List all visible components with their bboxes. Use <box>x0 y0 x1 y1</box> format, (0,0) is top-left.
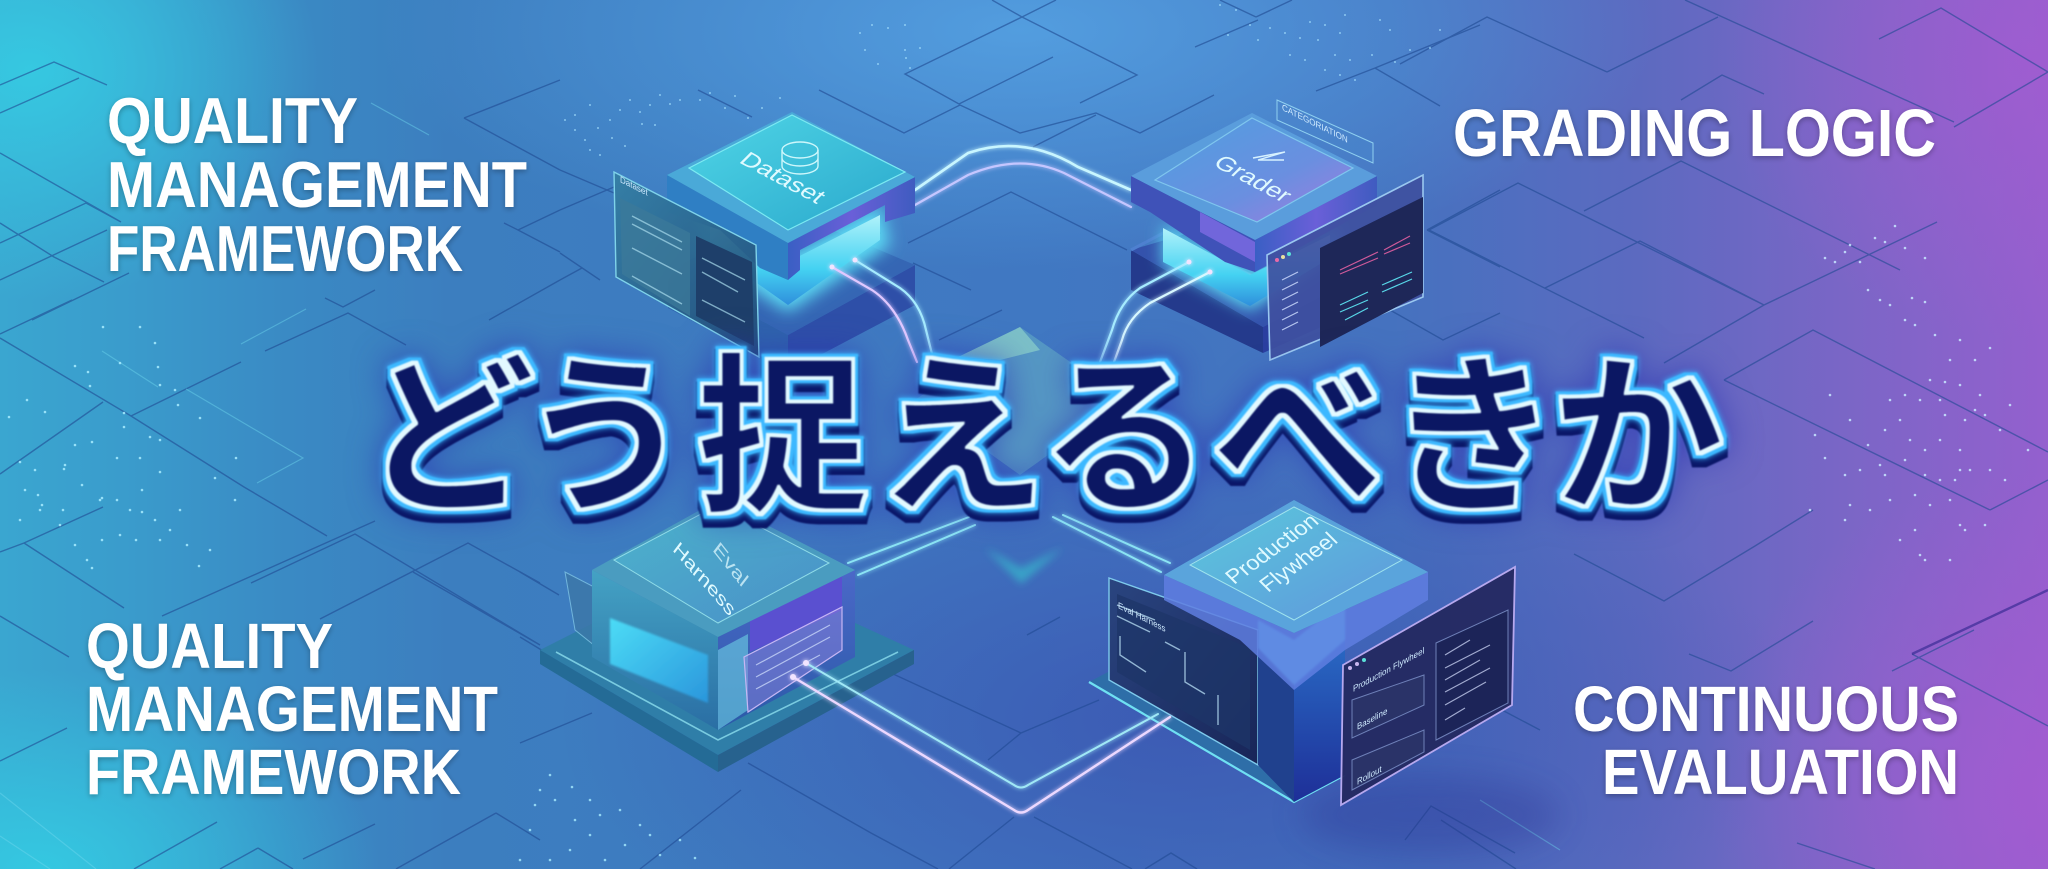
production right panel <box>1341 567 1515 805</box>
connectors: grader to hub <box>1100 262 1210 362</box>
production left panel: Eval Harness <box>1118 600 1166 634</box>
label: bottom-right: EVALUATION <box>1602 736 1959 808</box>
dataset side panel <box>614 172 759 357</box>
production right panel: Rollout <box>1357 763 1382 787</box>
label: top-left: MANAGEMENT <box>107 148 527 221</box>
connectors: dataset to grader <box>915 146 1131 207</box>
eval top plate <box>614 505 829 623</box>
grader top plate <box>1155 118 1353 222</box>
production label line 2: Flywheel <box>1254 528 1342 597</box>
grader side panel <box>1267 175 1423 360</box>
label: bottom-right: CONTINUOUS <box>1573 673 1959 745</box>
background 2: thick accent lines <box>1912 590 2048 654</box>
particle dots: top clusters <box>565 5 1440 155</box>
dataset frame sides <box>667 112 915 280</box>
label: bottom-left: MANAGEMENT <box>86 673 498 745</box>
grader frame sides <box>1131 113 1377 272</box>
grader label: Grader <box>1208 151 1297 207</box>
connectors: hub upper routes <box>848 515 1170 575</box>
grader glow core <box>1163 225 1340 310</box>
background highlight lines <box>0 103 1560 869</box>
label: bottom-left: QUALITY <box>86 610 333 682</box>
dataset side panel: Dataset <box>620 174 648 198</box>
floating tag: CATEGORIATION <box>1282 102 1348 145</box>
label: bottom-right <box>1573 673 1959 808</box>
cube: Dataset <box>614 112 915 372</box>
label: top-right: GRADING LOGIC <box>1453 96 1936 171</box>
icon: database <box>782 142 818 174</box>
soft floor shadow <box>1300 775 1560 855</box>
icon: pen <box>1253 152 1285 160</box>
production left panel <box>1109 578 1258 765</box>
eval glow window <box>610 618 708 703</box>
floating tag <box>1277 100 1373 163</box>
production label line 1: Production <box>1220 509 1324 589</box>
eval top <box>592 500 855 637</box>
title: どう捉えるべきか <box>363 343 1724 535</box>
connectors: dataset to hub <box>832 260 933 362</box>
label: top-left: FRAMEWORK <box>107 212 463 285</box>
particle dots: right cluster <box>1810 226 2028 560</box>
connector start glints <box>790 258 1212 680</box>
connectors: V route eval to production <box>793 663 1170 812</box>
dataset top plate <box>689 115 905 230</box>
eval right face <box>718 570 855 730</box>
cube: Grader <box>1131 100 1423 360</box>
label: bottom-left <box>86 610 498 808</box>
production right panel: Baseline <box>1357 705 1387 732</box>
eval overlay panel <box>744 607 842 712</box>
eval back panel <box>565 572 600 650</box>
eval label line 1: Eval <box>710 538 751 591</box>
production body <box>1258 600 1345 802</box>
grader base block <box>1131 215 1390 353</box>
dataset glow core <box>700 205 890 312</box>
production glass top <box>1164 500 1428 690</box>
eval left face <box>592 570 718 730</box>
eval label line 2: Harness <box>669 538 739 620</box>
production base <box>1089 650 1345 802</box>
label: top-left: QUALITY <box>107 84 358 157</box>
label: bottom-left: FRAMEWORK <box>86 736 461 808</box>
cube: Eval Harness <box>540 500 914 772</box>
production right panel: Production Flywheel <box>1353 645 1424 694</box>
center hub chip <box>915 327 1125 584</box>
dataset label: Dataset <box>734 148 831 208</box>
eval base plate <box>540 560 914 772</box>
particle dots: bottom cluster <box>520 775 695 860</box>
cube: Production Flywheel <box>1089 500 1560 855</box>
dataset base block <box>668 212 915 372</box>
production top plate <box>1190 507 1402 620</box>
particle dots: left cluster <box>9 327 236 568</box>
label: top-left <box>107 84 527 285</box>
